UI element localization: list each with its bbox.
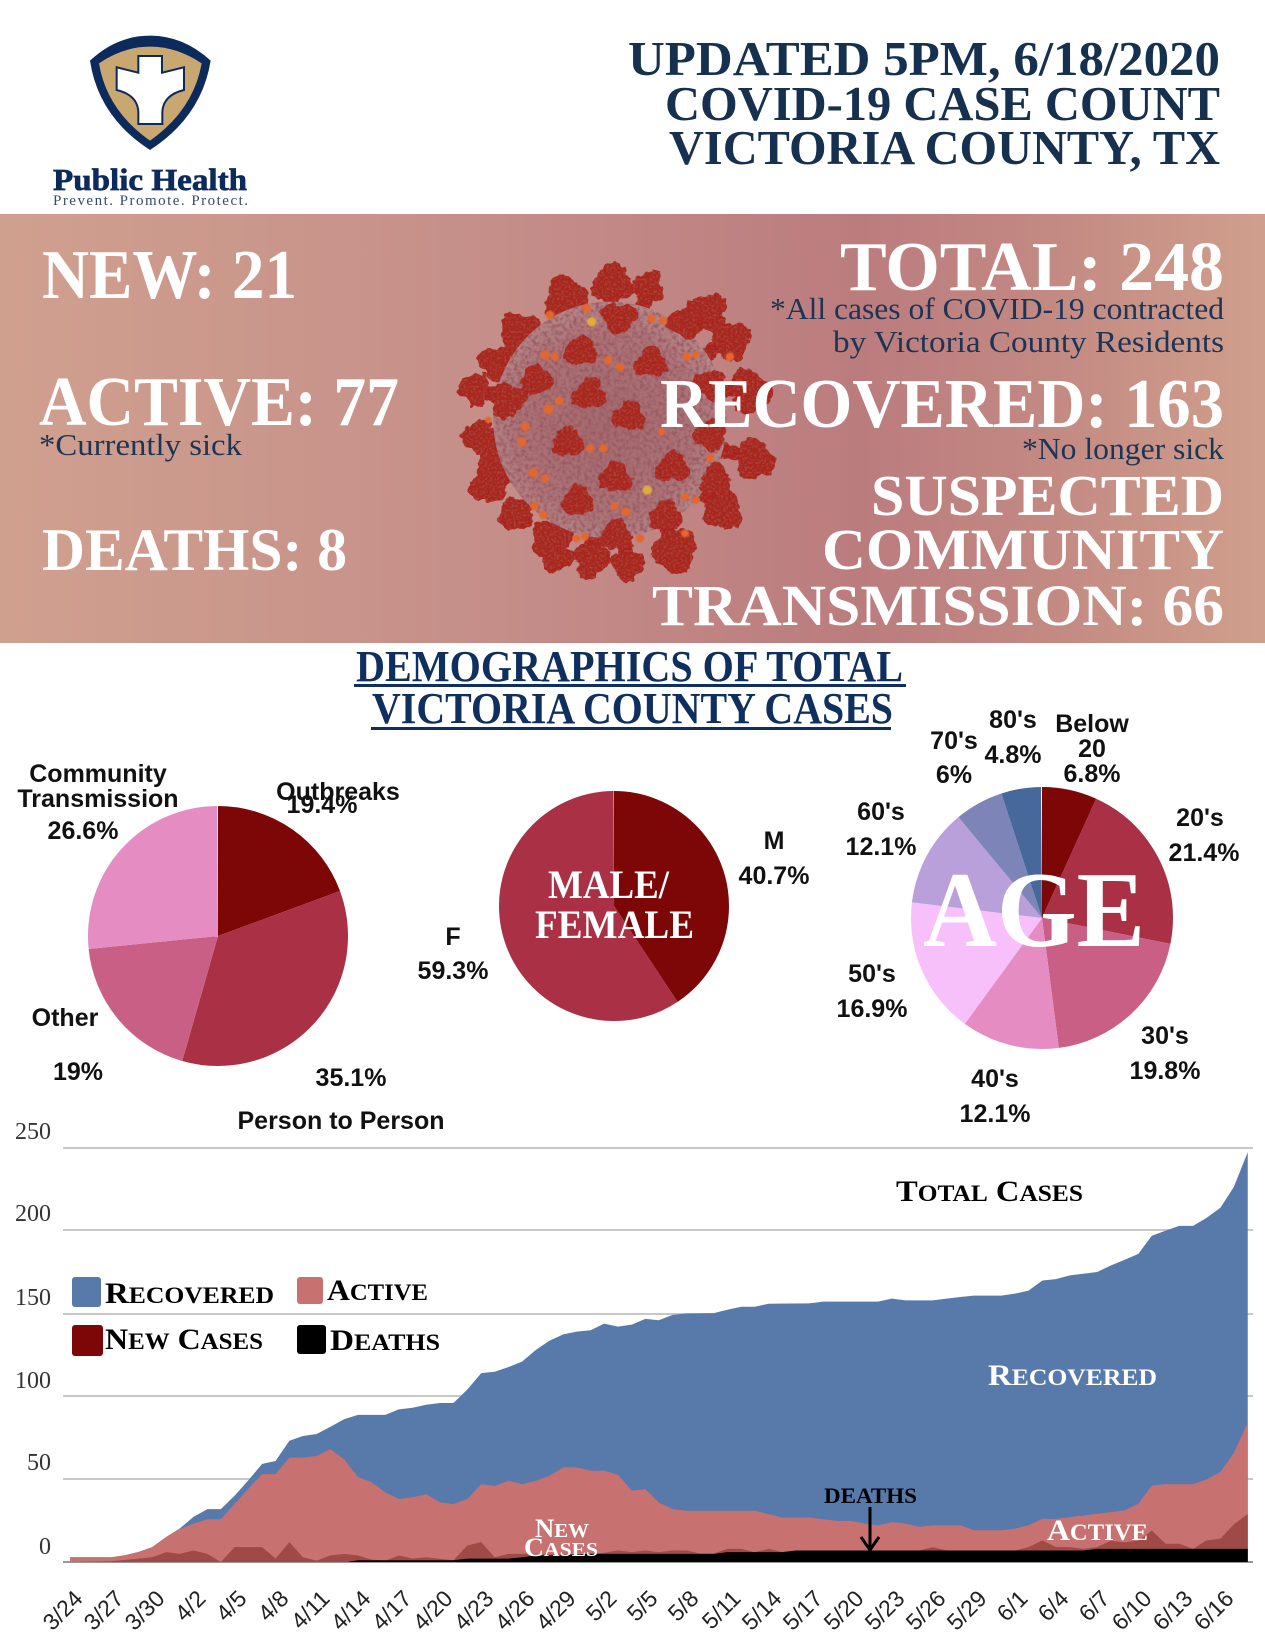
- icon: coronavirus: [456, 262, 780, 584]
- x axis date labels: 3/27: [78, 1585, 129, 1635]
- stat: suspected community transmission: TRANSMISSION: 66: [652, 573, 1224, 638]
- pie chart: transmission source: Other: [32, 1004, 99, 1032]
- title: [628, 31, 1220, 175]
- x axis date labels: 6/1: [992, 1585, 1033, 1626]
- pie chart: age: Below: [1055, 710, 1129, 738]
- logo wordmark: Public Health: [53, 162, 247, 197]
- x axis date labels: 6/4: [1033, 1585, 1074, 1626]
- heading: demographics: [354, 642, 906, 733]
- y axis labels: 100: [15, 1368, 51, 1394]
- heading: demographics: DEMOGRAPHICS OF TOTAL: [356, 642, 903, 691]
- pie chart: age: 70's: [930, 727, 978, 755]
- pie chart: age: 80's: [989, 706, 1037, 734]
- chart label: new cases: NEW: [535, 1514, 589, 1543]
- x axis date labels: 4/29: [530, 1585, 581, 1635]
- pie chart: age: 40's: [971, 1065, 1019, 1093]
- x axis date labels: 6/16: [1188, 1585, 1239, 1635]
- stat: deaths: DEATHS: 8: [42, 517, 347, 583]
- chart label: active: ACTIVE: [1047, 1514, 1148, 1547]
- pie chart: age: 60's: [857, 798, 905, 826]
- x axis date labels: 4/14: [325, 1585, 376, 1635]
- stat: recovered: *No longer sick: [1022, 431, 1224, 466]
- pie chart: age: AGE: [923, 851, 1145, 970]
- pie chart: transmission source: Transmission: [17, 785, 179, 813]
- chart label: new cases: CASES: [524, 1533, 598, 1562]
- pie chart: male/female: FEMALE: [535, 902, 694, 947]
- chart label: new cases: [524, 1514, 598, 1562]
- x axis date labels: 4/17: [366, 1585, 417, 1635]
- x axis date labels: 5/8: [663, 1585, 704, 1626]
- pie chart: age: 20's: [1176, 804, 1224, 832]
- x axis date labels: 4/26: [489, 1585, 540, 1635]
- y axis labels: 200: [15, 1201, 51, 1227]
- stat: total: by Victoria County Residents: [833, 324, 1224, 359]
- stat: suspected community transmission: [652, 463, 1224, 638]
- pie chart: age: 4.8%: [985, 741, 1041, 769]
- stat: active: *Currently sick: [39, 427, 243, 462]
- x axis date labels: [37, 1585, 1239, 1635]
- stat: active: ACTIVE: 77: [39, 364, 399, 441]
- title: COVID-19 CASE COUNT: [665, 76, 1220, 131]
- title: UPDATED 5PM, 6/18/2020: [628, 31, 1220, 86]
- y axis labels: 50: [27, 1450, 51, 1476]
- chart label: recovered: RECOVERED: [988, 1359, 1157, 1392]
- x axis date labels: 4/11: [286, 1585, 335, 1634]
- pie chart: transmission source: Person to Person: [238, 1107, 444, 1135]
- heading: demographics: VICTORIA COUNTY CASES: [372, 684, 893, 733]
- pie chart: age: 20: [1078, 735, 1106, 763]
- pie chart: age: 12.1%: [960, 1100, 1030, 1128]
- chart label: deaths: DEATHS: [824, 1483, 917, 1508]
- pie chart: age: 19.8%: [1130, 1057, 1200, 1085]
- pie chart: transmission source: 26.6%: [48, 817, 118, 845]
- stat: total: *All cases of COVID-19 contracted: [770, 291, 1224, 326]
- y axis labels: 0: [39, 1534, 51, 1560]
- stat: total: TOTAL: 248: [840, 229, 1224, 306]
- title: VICTORIA COUNTY, TX: [669, 120, 1220, 175]
- pie chart: age: 6.8%: [1064, 760, 1120, 788]
- pie chart: transmission source: [17, 760, 444, 1135]
- pie chart: male/female: 40.7%: [739, 862, 809, 890]
- chart label: total cases: TOTAL CASES: [896, 1175, 1083, 1208]
- pie chart: age: 50's: [848, 960, 896, 988]
- panel: case count banner: [0, 214, 1265, 643]
- y axis labels: [15, 1119, 51, 1560]
- y axis grid: [63, 1148, 1253, 1562]
- x axis date labels: 6/13: [1147, 1585, 1198, 1635]
- x axis date labels: 5/5: [622, 1585, 663, 1626]
- x axis date labels: 5/23: [859, 1585, 910, 1635]
- area: new cases: [70, 1514, 1248, 1562]
- arrow: deaths pointer: [861, 1507, 879, 1550]
- logo: Public Health: [53, 36, 248, 209]
- x axis date labels: 5/14: [736, 1585, 787, 1635]
- pie chart: transmission source: 19.4%: [287, 791, 357, 819]
- pie chart: age: 6%: [936, 761, 972, 789]
- pie chart: male/female: M: [764, 827, 784, 855]
- x axis date labels: 5/26: [900, 1585, 951, 1635]
- pie chart: transmission source: 19%: [53, 1058, 103, 1086]
- stat: suspected community transmission: SUSPECTED: [871, 463, 1224, 528]
- area: active: [70, 1423, 1248, 1562]
- x axis date labels: 6/7: [1074, 1585, 1115, 1626]
- stacked areas: [70, 1152, 1248, 1562]
- y axis labels: 150: [15, 1285, 51, 1311]
- area chart: cases over time: [15, 1119, 1253, 1635]
- x axis date labels: 5/20: [818, 1585, 869, 1635]
- logo tagline: Prevent. Promote. Protect.: [53, 193, 248, 209]
- stat: recovered: RECOVERED: 163: [660, 366, 1224, 443]
- x axis date labels: 6/10: [1106, 1585, 1157, 1635]
- y axis labels: 250: [15, 1119, 51, 1145]
- pie chart: age: 16.9%: [837, 995, 907, 1023]
- stat: new: NEW: 21: [42, 237, 297, 314]
- x axis date labels: 4/20: [407, 1585, 458, 1635]
- pie chart: male/female: 59.3%: [418, 957, 488, 985]
- x axis date labels: 5/11: [697, 1585, 746, 1634]
- stat: suspected community transmission: COMMUNITY: [822, 517, 1224, 582]
- x axis date labels: 5/29: [941, 1585, 992, 1635]
- legend: RECOVERED: [105, 1277, 274, 1310]
- pie chart: transmission source: Outbreaks: [276, 778, 400, 806]
- pie chart: transmission source: Community: [29, 760, 167, 788]
- pie chart: age: 12.1%: [846, 833, 916, 861]
- area: deaths: [347, 1549, 1248, 1562]
- x axis date labels: 4/2: [170, 1585, 211, 1626]
- icon: shield with cross: [90, 36, 211, 150]
- legend: NEW CASES: [105, 1323, 263, 1356]
- x axis date labels: 5/17: [777, 1585, 828, 1635]
- pie chart: male/female: MALE/: [548, 862, 670, 907]
- legend: [72, 1274, 440, 1357]
- legend: ACTIVE: [327, 1274, 428, 1307]
- pie chart: male/female: F: [445, 923, 461, 951]
- pie chart: age: [837, 706, 1239, 1128]
- x axis date labels: 5/2: [581, 1585, 622, 1626]
- pie chart: male/female: [418, 827, 809, 985]
- pie chart: age: 30's: [1141, 1022, 1189, 1050]
- x axis date labels: 3/30: [119, 1585, 170, 1635]
- pie chart: transmission source: 35.1%: [316, 1064, 386, 1092]
- stat: total: [770, 229, 1224, 359]
- x axis date labels: 4/5: [211, 1585, 252, 1626]
- pie chart: age: 21.4%: [1169, 839, 1239, 867]
- legend: DEATHS: [330, 1324, 440, 1357]
- x axis date labels: 4/8: [253, 1585, 294, 1626]
- x axis date labels: 4/23: [448, 1585, 499, 1635]
- area: recovered: [70, 1152, 1248, 1562]
- x axis date labels: 3/24: [37, 1585, 88, 1635]
